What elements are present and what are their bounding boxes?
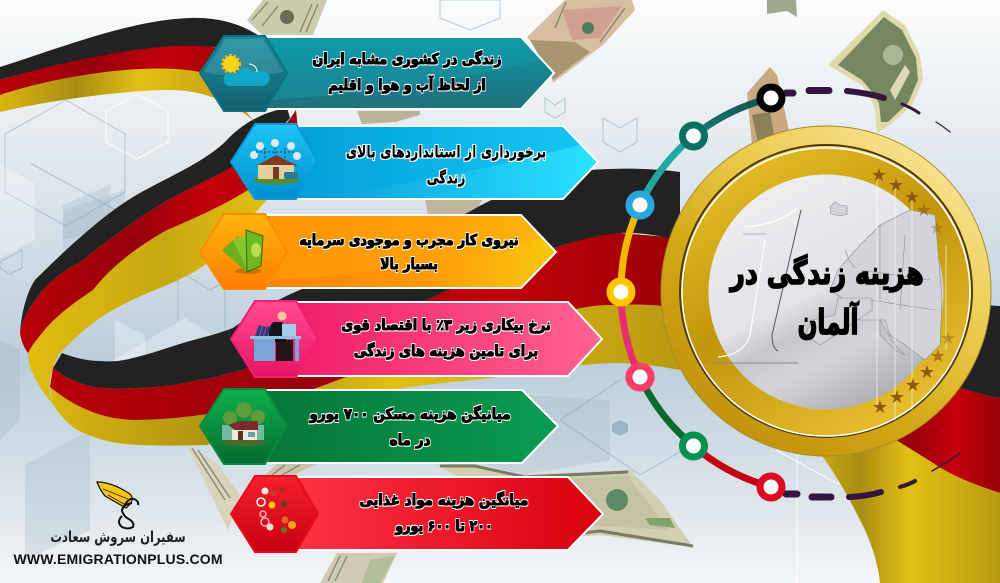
hexagon 2 [231, 124, 318, 199]
icon: cash [222, 230, 263, 274]
logo mark [97, 482, 138, 528]
timeline arc [621, 98, 771, 487]
text 5: میانیگن هزینه مسکن ۷۰۰ یورو [309, 405, 511, 423]
arrow body 3 [240, 215, 556, 288]
hexagon 4 [231, 301, 318, 377]
arrow body 4 [280, 302, 602, 376]
icon: food [257, 487, 296, 533]
coin numeral 1 [713, 209, 801, 363]
text 2: برخورداری از استانداردهای بالای [346, 144, 546, 161]
title [729, 254, 924, 342]
node green [682, 435, 704, 457]
arrow body 5 [240, 390, 558, 463]
node pink [629, 366, 651, 388]
coin stars [871, 165, 956, 418]
note: above panel six [263, 464, 317, 477]
note: bottom centre [320, 553, 397, 583]
text 1 [312, 50, 502, 94]
timeline nodes [610, 87, 782, 498]
text 3 [299, 232, 519, 273]
coin stars: ★ [919, 362, 935, 383]
icon: house and trees [222, 402, 266, 446]
text 4: نرخ بیکاری زیر ۳٪ با اقتصاد قوی [341, 317, 551, 334]
German flag ribbon: right of coin [800, 300, 1000, 583]
text 2: زندگی [427, 169, 465, 187]
text 5: در ماه [390, 432, 430, 449]
coin stars: ★ [889, 387, 905, 408]
note: behind coin top [747, 67, 790, 150]
hexagon 1 [200, 36, 287, 111]
coin stars: ★ [940, 328, 956, 349]
coin stars: ★ [872, 397, 888, 418]
arrow body 1 [240, 37, 554, 109]
coin highlights [877, 175, 946, 420]
coin stars: ★ [888, 175, 904, 196]
arrow body 2 [280, 126, 598, 199]
note: top left [247, 0, 327, 35]
node yellow [610, 281, 632, 303]
text 6: ۲۰۰ تا ۶۰۰ یورو [394, 518, 493, 535]
icon: office desk [250, 312, 301, 361]
banknotes behind panels [187, 0, 923, 583]
German flag ribbon: left sweep [0, 18, 680, 446]
panel 1: climate [200, 36, 554, 111]
icon: sun and cloud [223, 56, 270, 86]
panel 2: living standards [231, 124, 598, 199]
dashed arc top [786, 90, 950, 132]
title: آلمان [798, 301, 859, 342]
text 6: میانگین هزینه مواد غذایی [360, 491, 528, 509]
arrow body 6 [280, 477, 603, 550]
icon: smart house [250, 139, 301, 184]
node blue [629, 194, 651, 216]
text 3: نیروی کار مجرب و موجودی سرمایه [299, 232, 519, 249]
text 2 [346, 144, 546, 187]
text 6 [360, 491, 528, 535]
coin stars: ★ [930, 346, 946, 367]
note: right of panel six [437, 463, 693, 547]
coin stars: ★ [905, 375, 921, 396]
hexagon 3 [200, 214, 287, 289]
text 4: برای تامین هزینه های زندگی [354, 342, 538, 360]
text 1: زندگی در کشوری مشابه ایران [312, 50, 502, 68]
note: under panel one [357, 111, 420, 124]
coin stars: ★ [904, 187, 920, 208]
logo name: سفیران سروش سعادت [50, 529, 186, 546]
text 1: از لحاظ آب و هوا و اقلیم [328, 76, 486, 94]
node red [760, 476, 782, 498]
node black [760, 87, 782, 109]
website: WWW.EMIGRATIONPLUS.COM [14, 551, 222, 567]
panel 6: food cost [231, 476, 603, 552]
logo [14, 482, 222, 567]
panel 5: housing cost [200, 389, 558, 464]
text 5 [309, 405, 511, 449]
node teal [682, 125, 704, 147]
coin europe map [805, 202, 942, 360]
text 4 [341, 317, 551, 360]
note: green dollar [828, 10, 923, 133]
text 3: بسیار بالا [380, 256, 438, 273]
note: under panel two [425, 200, 482, 215]
note: left of panel six [187, 445, 240, 530]
coin stars: ★ [871, 165, 887, 186]
hexagon 6 [231, 476, 318, 552]
dashed arc bottom [786, 453, 960, 497]
note: top centre [527, 0, 635, 83]
title: هزینه زندگی در [729, 254, 924, 292]
panel 3: workforce [200, 214, 556, 289]
note: small top [767, 0, 797, 17]
euro coin [661, 126, 991, 456]
coin stars: ★ [929, 218, 945, 239]
hexagon 5 [200, 389, 287, 464]
panel 4: unemployment [231, 301, 602, 377]
coin stars: ★ [916, 200, 932, 221]
